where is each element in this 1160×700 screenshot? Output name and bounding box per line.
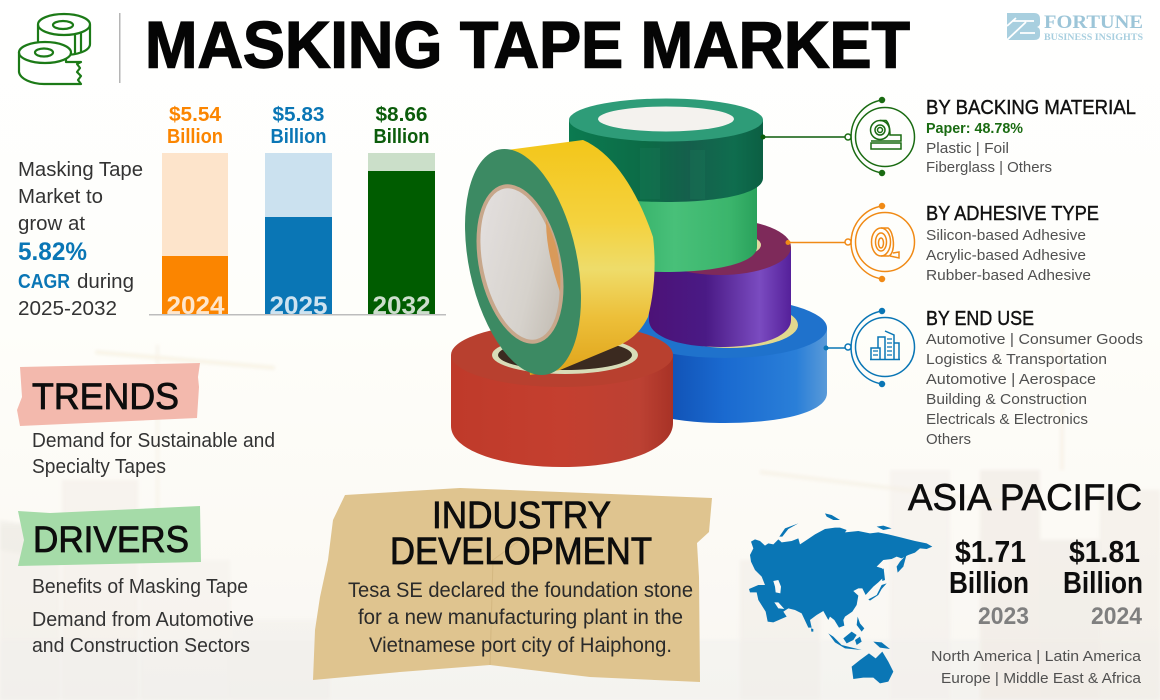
panel: industry development: Tesa SE declared the foundation stone bbox=[348, 579, 693, 602]
header divider bbox=[119, 13, 120, 83]
segment: by adhesive type: Silicon-based Adhesive bbox=[926, 227, 1086, 244]
growth text block: Market to bbox=[18, 186, 103, 208]
bar 2024: Billion bbox=[167, 126, 223, 148]
roll: purple bbox=[629, 219, 791, 347]
panel: Asia Pacific market values bbox=[908, 477, 1143, 687]
panel: drivers: Demand from Automotive bbox=[32, 609, 254, 631]
logo: Fortune Business Insights: FORTUNE bbox=[1044, 12, 1143, 33]
title: MASKING TAPE MARKET bbox=[145, 8, 910, 82]
segment: by backing material: Plastic | Foil bbox=[926, 140, 1009, 157]
segment: by adhesive type: Rubber-based Adhesive bbox=[926, 267, 1091, 284]
roll: red bbox=[451, 323, 673, 467]
illustration: stack of coloured tape rolls bbox=[446, 98, 827, 467]
roll: blue bbox=[623, 298, 827, 423]
connector: adhesive type bbox=[786, 240, 845, 245]
panel: Asia Pacific market values: ASIA PACIFIC bbox=[908, 477, 1142, 518]
value 2024 bbox=[1063, 534, 1143, 630]
segment: by backing material: Paper: 48.78% bbox=[926, 121, 1023, 137]
segment: by end use: Logistics & Transportation bbox=[926, 351, 1107, 368]
growth text block: 5.82% bbox=[18, 238, 87, 266]
bar 2025: $5.83 bbox=[272, 104, 324, 126]
panel: industry development: Vietnamese port city of Haiphong. bbox=[369, 634, 672, 657]
bar 2025 bbox=[265, 104, 332, 320]
value 2023: $1.71 bbox=[955, 534, 1026, 569]
bar 2032 bbox=[368, 104, 435, 320]
segment: by backing material: Fiberglass | Others bbox=[926, 159, 1052, 176]
panel: industry development: INDUSTRY bbox=[432, 495, 611, 537]
segment: by end use: Automotive | Consumer Goods bbox=[926, 331, 1143, 348]
bar 2032: $8.66 bbox=[376, 104, 428, 126]
value 2024: $1.81 bbox=[1069, 534, 1140, 569]
segment: by end use: BY END USE bbox=[926, 308, 1034, 330]
logo: Fortune Business Insights: BUSINESS INSIGHTS bbox=[1044, 33, 1143, 43]
value 2023: 2023 bbox=[978, 603, 1029, 630]
segment: by adhesive type: BY ADHESIVE TYPE bbox=[926, 203, 1099, 225]
growth text block: 2025-2032 bbox=[18, 298, 117, 320]
panel: trends: TRENDS bbox=[32, 376, 179, 417]
bar chart: market size bbox=[149, 104, 446, 320]
segment: by backing material bbox=[926, 97, 1136, 176]
panel: drivers: DRIVERS bbox=[33, 519, 189, 560]
icon: adhesive type bbox=[845, 204, 914, 282]
segment: by end use: Automotive | Aerospace bbox=[926, 371, 1096, 388]
segment: by adhesive type: Acrylic-based Adhesive bbox=[926, 247, 1086, 264]
panel: Asia Pacific market values: North America | Latin America bbox=[931, 648, 1142, 665]
value 2024: Billion bbox=[1063, 565, 1143, 600]
panel: trends: Specialty Tapes bbox=[32, 456, 166, 478]
bar 2024: $5.54 bbox=[169, 104, 222, 126]
roll: dark green bbox=[569, 98, 763, 202]
growth text block: during bbox=[77, 271, 134, 293]
panel: industry development: for a new manufacturing plant in the bbox=[358, 606, 683, 629]
segment: by backing material: BY BACKING MATERIAL bbox=[926, 97, 1136, 119]
bar 2032: Billion bbox=[374, 126, 430, 148]
value 2023 bbox=[949, 534, 1029, 630]
connector: end use bbox=[824, 346, 845, 350]
connector: backing material bbox=[760, 134, 845, 140]
roll: light green bbox=[573, 182, 757, 272]
growth text block: Masking Tape bbox=[18, 159, 143, 181]
panel: trends: Demand for Sustainable and bbox=[32, 430, 275, 452]
growth text block bbox=[18, 159, 143, 320]
segment: by end use bbox=[926, 308, 1143, 448]
bar 2025: Billion bbox=[270, 126, 326, 148]
bar 2032: 2032 bbox=[372, 292, 430, 320]
bar 2024 bbox=[162, 104, 228, 320]
value 2023: Billion bbox=[949, 565, 1029, 600]
segment: by adhesive type bbox=[926, 203, 1099, 284]
bar 2024: 2024 bbox=[166, 292, 225, 320]
panel: drivers: and Construction Sectors bbox=[32, 635, 250, 657]
icon: backing material bbox=[845, 98, 914, 176]
panel: Asia Pacific market values: Europe | Middle East & Africa bbox=[941, 670, 1142, 687]
segment: by end use: Building & Construction bbox=[926, 391, 1087, 408]
growth text block: CAGR bbox=[18, 271, 70, 293]
panel: drivers bbox=[18, 506, 254, 657]
icon: masking tape rolls bbox=[19, 14, 90, 84]
map: Asia Pacific bbox=[749, 513, 932, 683]
panel: industry development bbox=[313, 488, 712, 682]
panel: drivers: Benefits of Masking Tape bbox=[32, 576, 248, 598]
icon: end use bbox=[845, 308, 914, 386]
bar 2025: 2025 bbox=[270, 292, 328, 320]
growth text block: grow at bbox=[18, 213, 85, 235]
segment: by end use: Others bbox=[926, 431, 971, 448]
value 2024: 2024 bbox=[1091, 603, 1143, 630]
panel: trends bbox=[17, 363, 275, 478]
panel: industry development: DEVELOPMENT bbox=[390, 531, 652, 573]
segment: by end use: Electricals & Electronics bbox=[926, 411, 1088, 428]
roll: yellow upright bbox=[446, 138, 655, 386]
logo: Fortune Business Insights bbox=[1007, 12, 1143, 43]
